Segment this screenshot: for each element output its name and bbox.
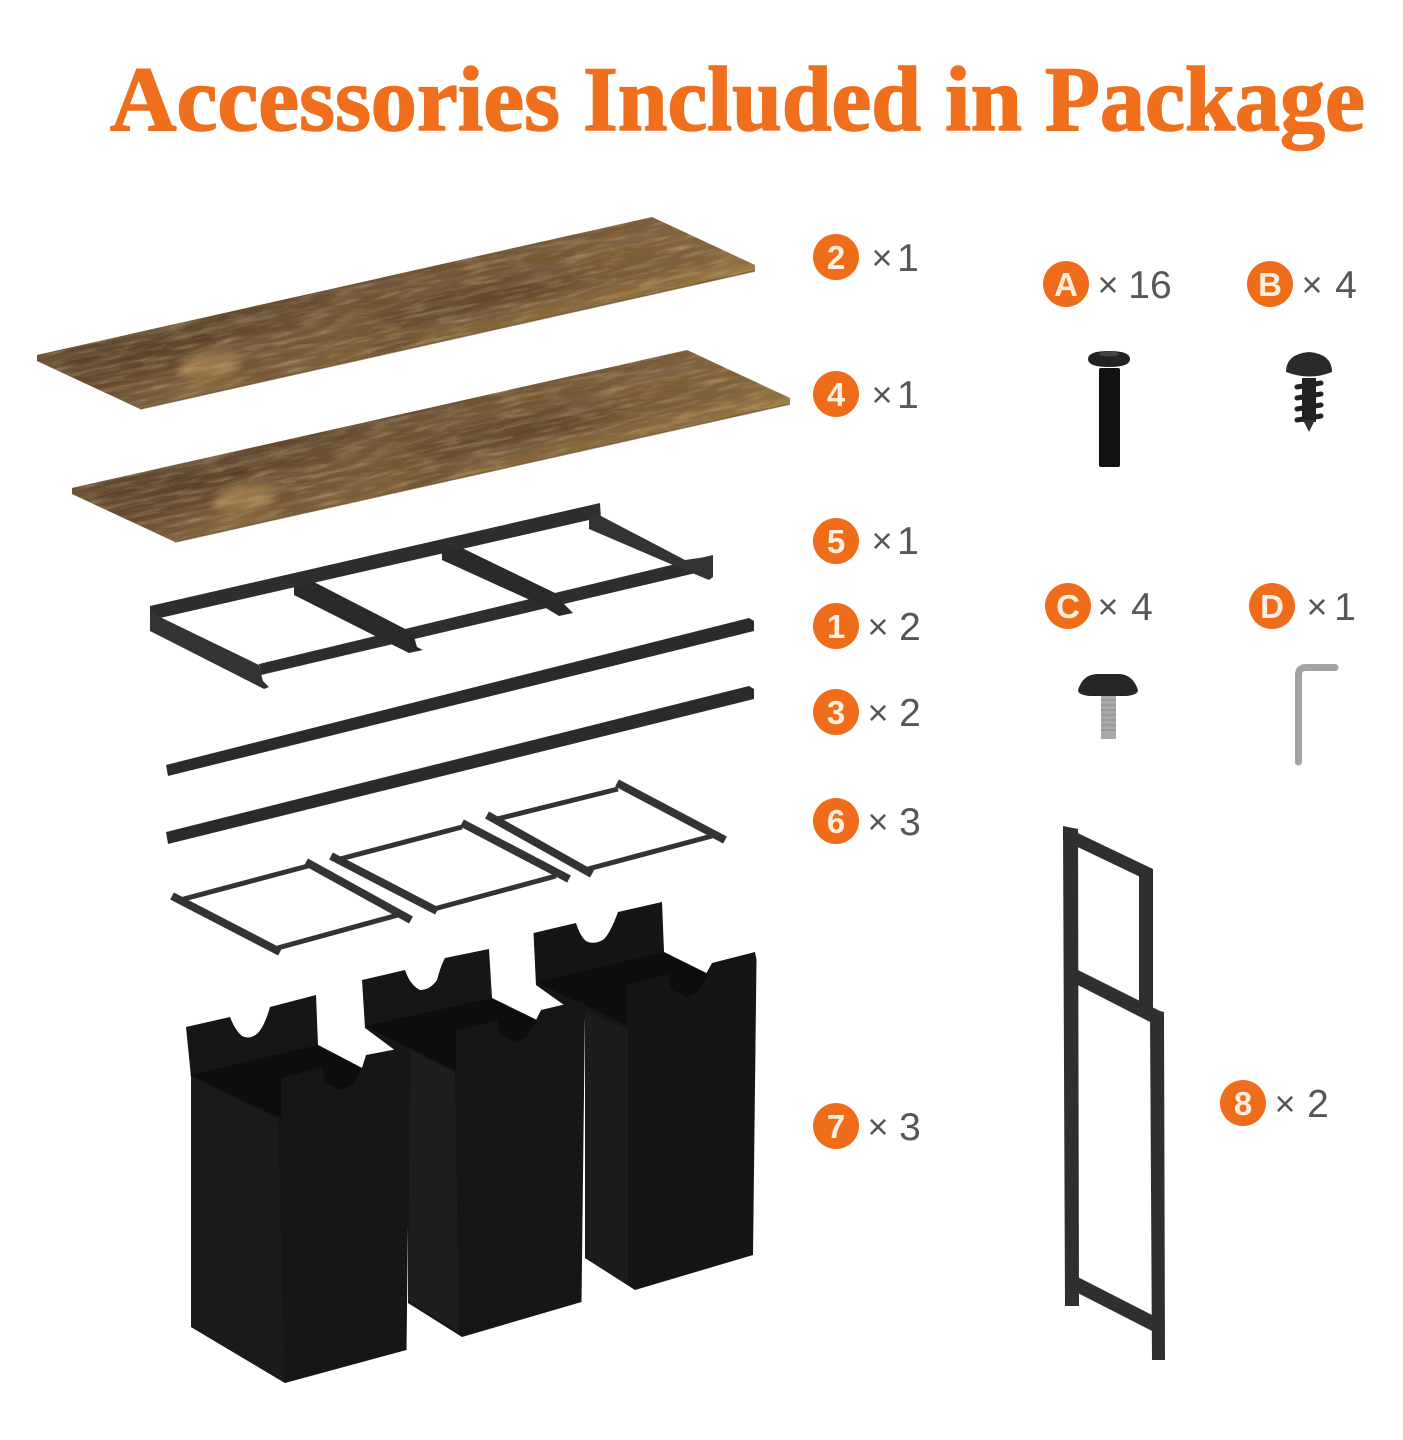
label: 3 × 2: 3 <box>827 694 845 731</box>
label: A × 16: × <box>1097 264 1119 305</box>
part 5: black shelf frame <box>150 503 713 689</box>
label: B × 4: × <box>1301 264 1323 305</box>
part 3: long rod <box>166 686 754 844</box>
label: A × 16: A <box>1054 266 1078 303</box>
label: 8 × 2: 8 <box>1234 1085 1252 1122</box>
label: 8 × 2 <box>1220 1080 1329 1126</box>
part 6: three small frames <box>172 783 725 952</box>
label: D × 1: D <box>1260 588 1284 625</box>
label: B × 4 <box>1247 261 1357 307</box>
label: 6 × 3: 3 <box>899 801 921 844</box>
label: 4 × 1: × <box>871 374 893 415</box>
label: 4 × 1: 4 <box>827 376 846 413</box>
label: 2 × 1: × <box>871 237 893 278</box>
label: 1 × 2: 2 <box>899 606 921 649</box>
hamper: middle <box>362 949 585 1337</box>
part 2: wood top board <box>0 101 836 519</box>
label: D × 1: × <box>1306 586 1328 627</box>
label: 1 × 2: × <box>867 606 889 647</box>
hamper: front <box>186 995 410 1383</box>
label: D × 1 <box>1249 583 1356 629</box>
part 7: three black fabric hampers <box>186 902 756 1383</box>
label: 1 × 2: 1 <box>827 608 845 645</box>
label: 7 × 3: 7 <box>827 1108 845 1145</box>
label: 2 × 1: 1 <box>897 237 919 280</box>
part 1: long rod <box>166 618 754 776</box>
label: 6 × 3 <box>813 798 921 844</box>
icon: screw B <box>1286 352 1332 432</box>
label: B × 4: B <box>1258 266 1282 303</box>
label: 7 × 3: × <box>867 1106 889 1147</box>
label: 5 × 1: 1 <box>897 520 919 563</box>
label: 3 × 2: 2 <box>899 692 921 735</box>
label: 5 × 1 <box>813 518 919 564</box>
title: Included <box>583 48 921 150</box>
label: 6 × 3: × <box>867 801 889 842</box>
title: Accessories <box>110 48 560 150</box>
label: 6 × 3: 6 <box>827 803 845 840</box>
label: A × 16: 16 <box>1128 264 1172 307</box>
label: C × 4: 4 <box>1131 586 1153 629</box>
label: 8 × 2: × <box>1274 1083 1296 1124</box>
part 8: tall side frame <box>1063 826 1165 1360</box>
label: 4 × 1: 1 <box>897 374 919 417</box>
label: C × 4: × <box>1097 586 1119 627</box>
part 4: wood lower board <box>0 234 871 652</box>
label: 5 × 1: × <box>871 520 893 561</box>
label: 8 × 2: 2 <box>1307 1083 1329 1126</box>
label: 5 × 1: 5 <box>827 523 845 560</box>
icon: bolt A <box>1088 351 1130 467</box>
label: 3 × 2: × <box>867 692 889 733</box>
label: C × 4 <box>1045 583 1153 629</box>
label: 1 × 2 <box>813 603 921 649</box>
title: in <box>945 48 1022 150</box>
title: Package <box>1045 48 1365 150</box>
icon: allen key D <box>1298 668 1335 762</box>
hamper: right <box>534 902 756 1290</box>
icon: foot pad C <box>1078 674 1138 739</box>
label: 2 × 1: 2 <box>827 239 845 276</box>
label: D × 1: 1 <box>1334 586 1356 629</box>
label: 7 × 3 <box>813 1103 921 1149</box>
label: 4 × 1 <box>813 371 919 417</box>
label: 2 × 1 <box>813 234 919 280</box>
label: B × 4: 4 <box>1335 264 1357 307</box>
label: 3 × 2 <box>813 689 921 735</box>
title <box>110 48 1365 150</box>
label: 7 × 3: 3 <box>899 1106 921 1149</box>
label: A × 16 <box>1043 261 1172 307</box>
label: C × 4: C <box>1056 588 1080 625</box>
